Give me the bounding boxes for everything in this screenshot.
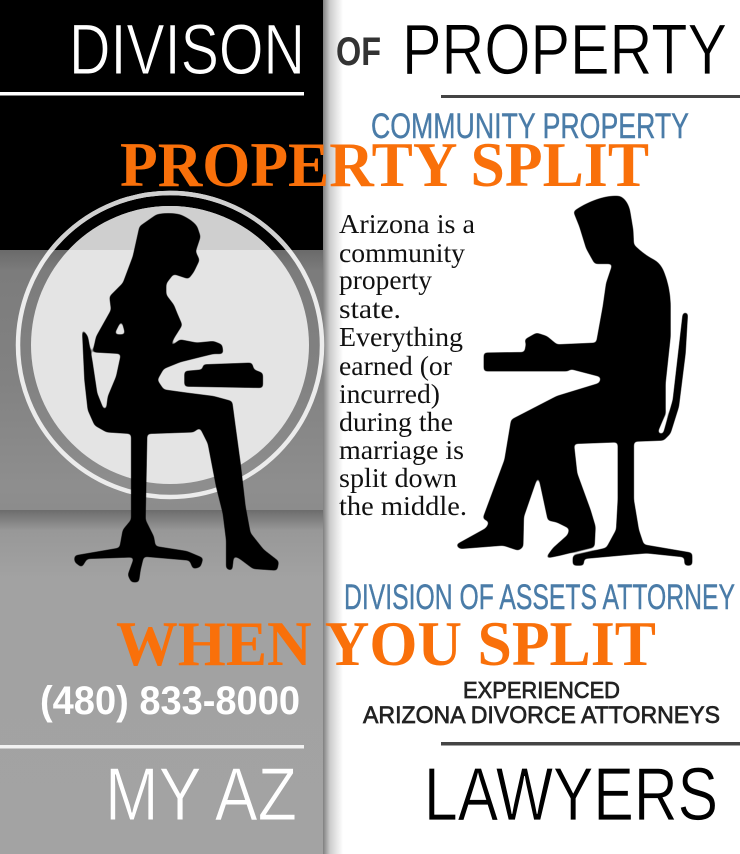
text block: Arizona community property explanation: earned (or	[339, 351, 452, 381]
panel: right shadow	[323, 0, 343, 854]
icon: man silhouette at desk	[457, 196, 692, 565]
text block: experienced attorneys: EXPERIENCED	[463, 677, 620, 703]
text block: Arizona community property explanation: property	[339, 265, 433, 295]
text block: experienced attorneys	[363, 677, 720, 729]
divider: bottom right	[441, 742, 740, 746]
headline: property split: PROPERTY SPLIT	[120, 130, 649, 200]
text block: Arizona community property explanation	[339, 209, 475, 521]
divider: top right	[441, 95, 740, 98]
text block: Arizona community property explanation: state.	[339, 294, 401, 324]
headline: when you split: WHEN YOU SPLIT	[116, 608, 656, 679]
text block: Arizona community property explanation: the middle.	[339, 491, 467, 521]
text block: Arizona community property explanation: during the	[339, 407, 453, 437]
text block: Arizona community property explanation: marriage is	[339, 435, 464, 465]
text block: Arizona community property explanation: community	[339, 238, 466, 268]
icon: woman silhouette at desk	[75, 214, 278, 582]
divider: top left	[0, 92, 304, 96]
phone number: (480) 833-8000	[40, 679, 300, 723]
text block: Arizona community property explanation: split down	[339, 463, 458, 493]
panel: left background bands	[0, 0, 323, 854]
divider: bottom left	[0, 745, 304, 748]
heading: DIVISON: DIVISON	[69, 11, 305, 90]
text block: Arizona community property explanation: incurred)	[339, 379, 440, 409]
text block: Arizona community property explanation: Everything	[339, 322, 463, 352]
icon: circle behind woman	[18, 193, 322, 497]
text block: Arizona community property explanation: Arizona is a	[339, 209, 475, 239]
footer: MY AZ: MY AZ	[105, 752, 297, 836]
text block: experienced attorneys: ARIZONA DIVORCE ATTORNEYS	[363, 702, 720, 729]
heading: OF: OF	[336, 30, 381, 74]
